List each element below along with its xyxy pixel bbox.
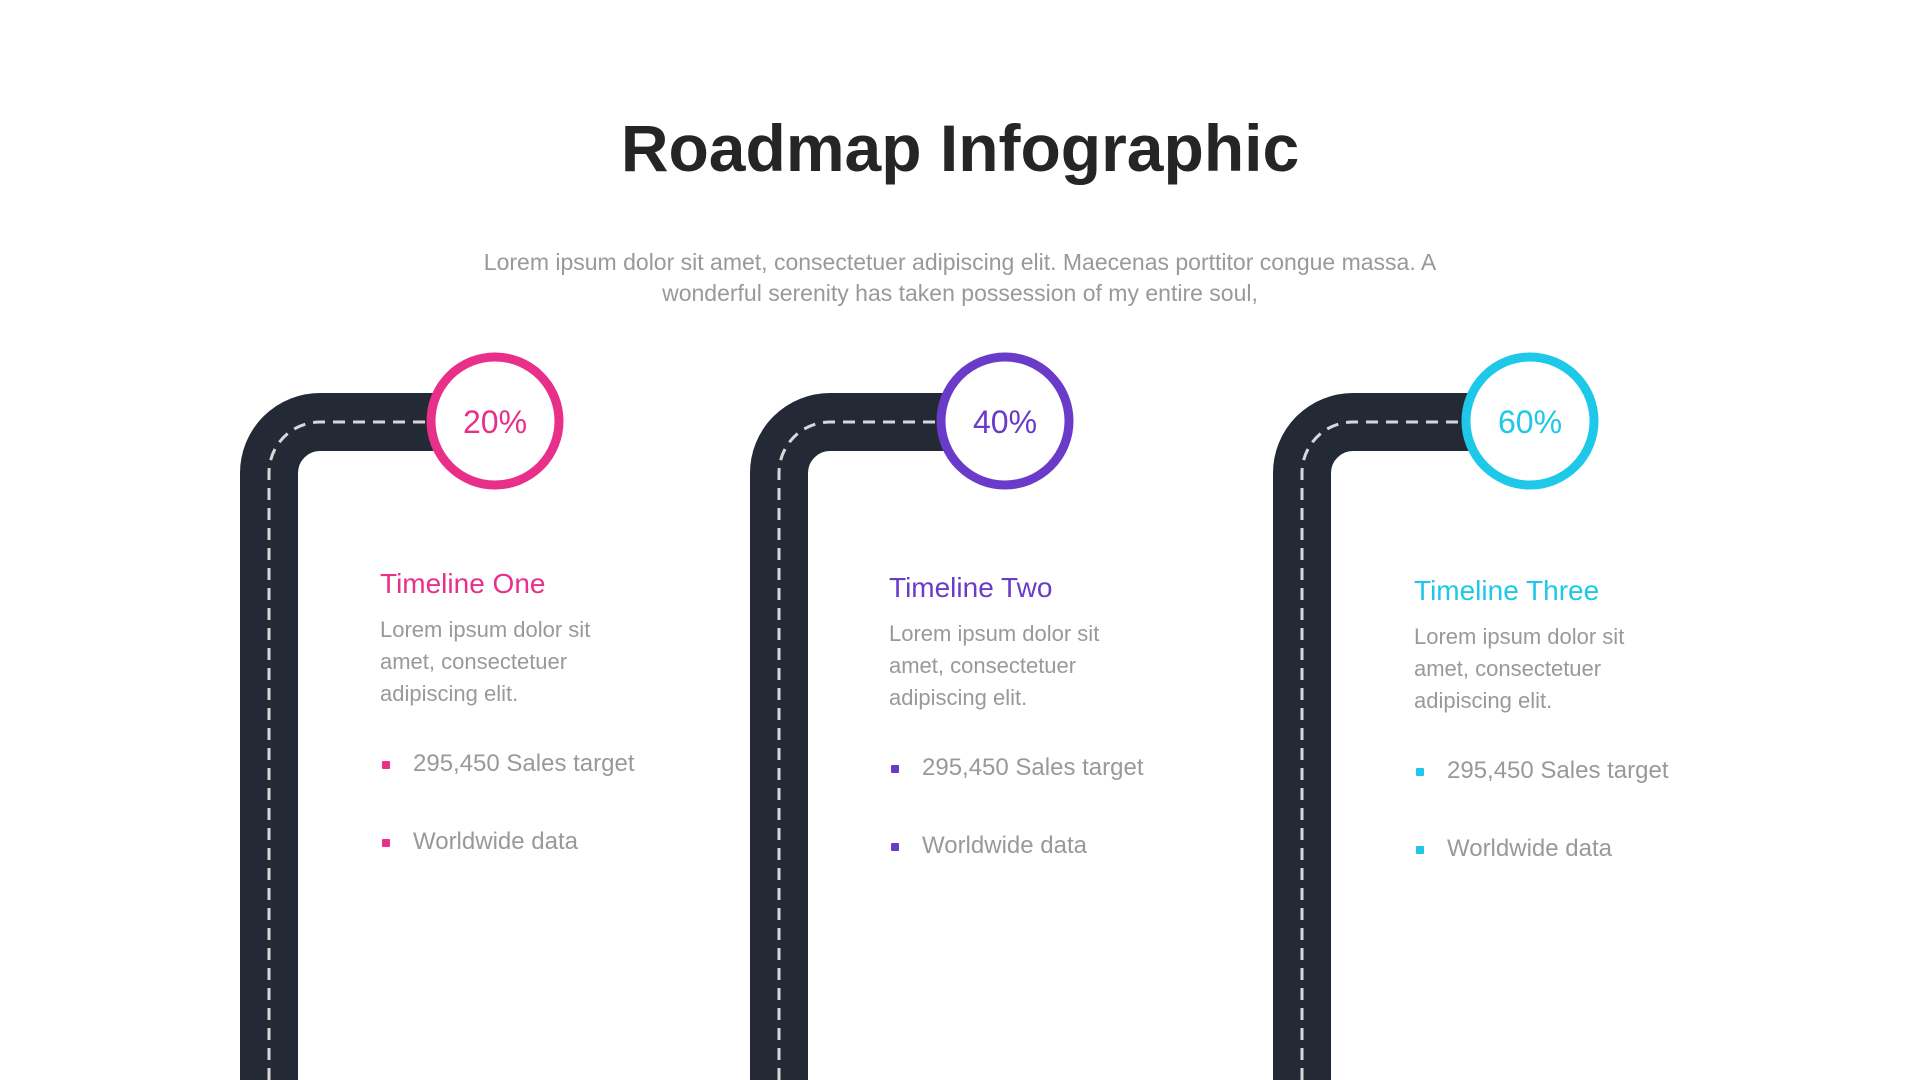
circle: 20% [431, 357, 559, 485]
subtitle: Lorem ipsum dolor sit amet, consectetuer adipiscing elit. Maecenas porttitor congue massa. A [484, 249, 1436, 275]
text block: amet, consectetuer [1414, 656, 1601, 681]
text block: amet, consectetuer [380, 649, 567, 674]
text block [1414, 624, 1624, 713]
bullet: sales: 295,450 Sales target [413, 750, 634, 777]
subtitle [484, 249, 1436, 306]
circle: 60% [1466, 357, 1594, 485]
text block: Lorem ipsum dolor sit [1414, 624, 1624, 649]
title: Roadmap Infographic [621, 111, 1299, 185]
bullet: sales: 295,450 Sales target [1447, 757, 1668, 784]
text block: adipiscing elit. [380, 681, 518, 706]
bullet: worldwide: Worldwide data [413, 828, 578, 855]
text block [380, 617, 590, 706]
text block: Lorem ipsum dolor sit [889, 621, 1099, 646]
road three [1302, 422, 1525, 1080]
road one [269, 422, 495, 1080]
text block: amet, consectetuer [889, 653, 1076, 678]
circle: 60%: 60% [1498, 404, 1562, 440]
heading: Timeline Three [1414, 575, 1599, 606]
panel: timeline one [380, 568, 634, 855]
circle: 20%: 20% [463, 404, 527, 440]
bullet: sales: 295,450 Sales target [922, 754, 1144, 781]
bullet: worldwide: Worldwide data [922, 832, 1087, 859]
text block: adipiscing elit. [1414, 688, 1552, 713]
heading: Timeline One [380, 568, 545, 599]
text block: Lorem ipsum dolor sit [380, 617, 590, 642]
text block [889, 621, 1100, 710]
bullet: worldwide: Worldwide data [1447, 835, 1612, 862]
circle: 40% [941, 357, 1069, 485]
text block: adipiscing elit. [889, 685, 1027, 710]
panel: timeline two [889, 572, 1144, 859]
subtitle: wonderful serenity has taken possession of my entire soul, [662, 280, 1258, 306]
panel: timeline three [1414, 575, 1668, 862]
circle: 40%: 40% [973, 404, 1037, 440]
heading: Timeline Two [889, 572, 1052, 603]
road two [779, 422, 1000, 1080]
